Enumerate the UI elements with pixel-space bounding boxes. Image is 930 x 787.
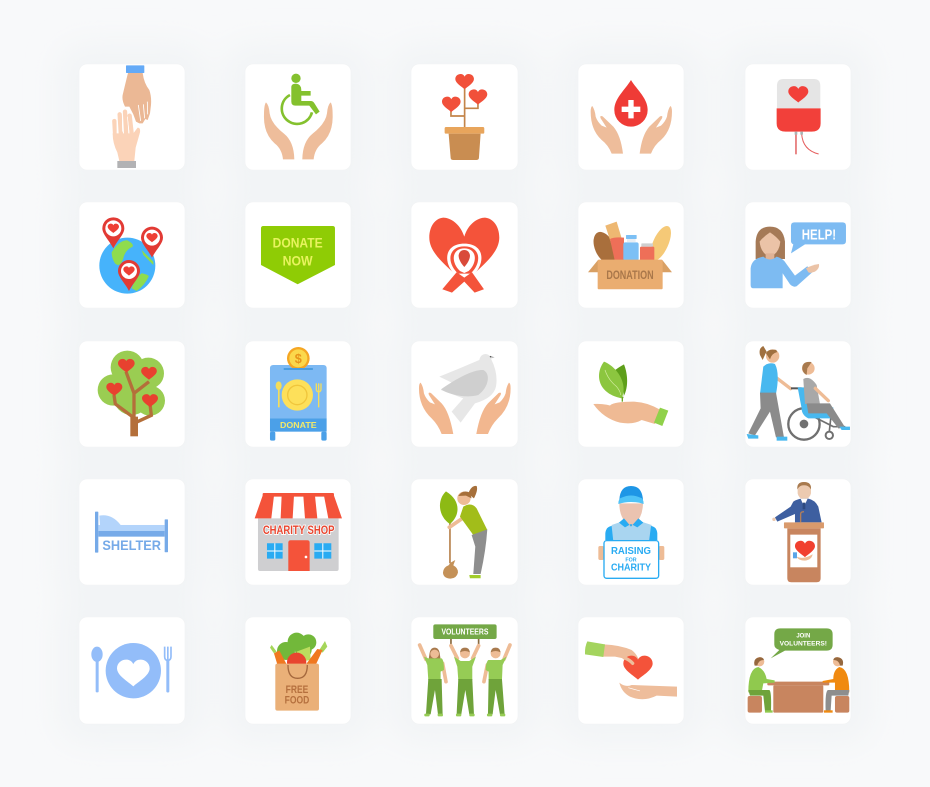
icon: three volunteers with banner: VOLUNTEERS xyxy=(441,627,489,637)
panel: giving heart xyxy=(578,617,684,724)
panel: help request xyxy=(745,202,851,308)
icon: grocery bag of vegetables: FREE xyxy=(286,684,308,696)
panel: helping hands xyxy=(79,64,185,170)
panel: speaker xyxy=(745,479,851,585)
icon: donate now banner: NOW xyxy=(283,254,313,269)
icon: shelter bed: SHELTER xyxy=(102,537,161,553)
panel: peace dove xyxy=(411,341,518,447)
icon: donate now banner: DONATE xyxy=(273,236,323,251)
icon: two people at table: VOLUNTEERS! xyxy=(780,642,827,648)
icon: tree with hearts xyxy=(98,351,165,436)
panel: wheelchair care xyxy=(245,64,351,170)
icon: man holding sign: RAISING xyxy=(611,546,651,557)
icon: hands passing heart xyxy=(585,641,677,699)
panel: leaf in hand xyxy=(578,341,684,447)
panel: blood bag xyxy=(745,64,851,170)
panel: raising for charity xyxy=(578,479,684,585)
icon: charity shop building: CHARITY SHOP xyxy=(263,523,334,537)
icon: food donation box: DONATION xyxy=(606,269,654,282)
panel: blood donation xyxy=(578,64,684,170)
icon: helping hands xyxy=(113,65,151,168)
icon: two people at table: JOIN xyxy=(796,634,810,640)
icon: man holding sign: FOR xyxy=(625,558,637,564)
panel: free food xyxy=(245,617,351,724)
panel: free meal xyxy=(79,617,185,724)
icon: wheelchair in hands xyxy=(264,74,333,159)
icon: blood drop in hands xyxy=(591,80,672,154)
icon: man holding sign: CHARITY xyxy=(611,563,651,574)
icon: heart plant in pot xyxy=(442,74,487,160)
icon: coin and meal donation box xyxy=(270,347,327,441)
icon: woman planting sapling xyxy=(440,486,487,579)
icon: man holding sign xyxy=(598,486,664,578)
panel: donate now xyxy=(245,202,351,308)
panel: food donate box xyxy=(245,341,351,447)
icon: woman asking for help: HELP! xyxy=(802,227,836,243)
icon: grocery bag of vegetables xyxy=(270,633,327,711)
panel: donation box xyxy=(578,202,684,308)
panel: tree planting xyxy=(411,479,518,585)
icon: grocery bag of vegetables: FOOD xyxy=(285,695,309,707)
panel: shelter xyxy=(79,479,185,585)
panel: charity shop xyxy=(245,479,351,585)
panel: world charity xyxy=(79,202,185,308)
icon: heart with awareness ribbon xyxy=(429,218,499,293)
icon: donate now banner xyxy=(261,226,335,284)
panel: heart tree xyxy=(79,341,185,447)
icon: dove in hands xyxy=(419,354,511,434)
panel: wheelchair assistance xyxy=(745,341,851,447)
panel: heart plant xyxy=(411,64,518,170)
icon: coin and meal donation box: DONATE xyxy=(280,420,317,430)
icon: plate with heart xyxy=(91,643,171,698)
panel: join volunteers xyxy=(745,617,851,724)
icon: speaker at podium xyxy=(772,482,824,582)
icon: globe with heart pins xyxy=(99,217,163,294)
panel: ribbon heart xyxy=(411,202,518,308)
panel: volunteers xyxy=(411,617,518,724)
icon: coin and meal donation box: $ xyxy=(295,352,302,366)
icon: blood bag xyxy=(777,79,821,154)
icon: woman pushing wheelchair xyxy=(747,346,850,441)
icon: two people at table xyxy=(748,628,849,713)
icon: hand holding leaves xyxy=(593,362,668,426)
